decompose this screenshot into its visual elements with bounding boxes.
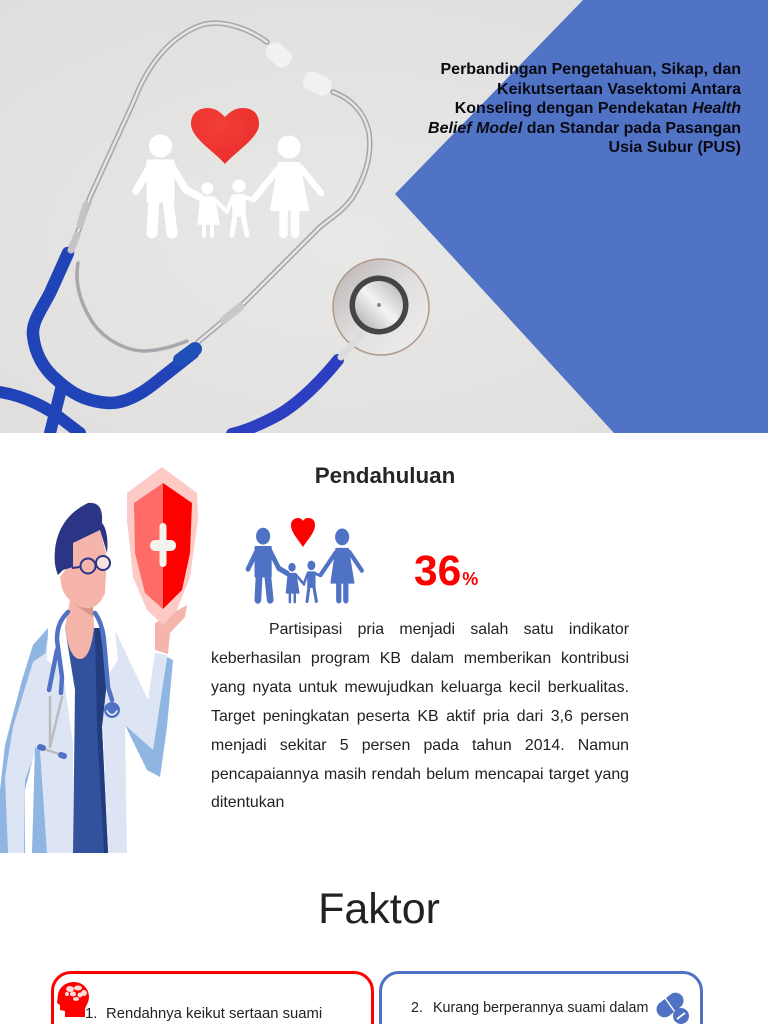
shield: [127, 467, 198, 625]
icon: white family: [136, 134, 321, 236]
title: Belief Model dan Standar pada Pasangan: [428, 120, 741, 136]
icon: red head with brain: [57, 982, 89, 1017]
icon: blue pills: [656, 992, 689, 1024]
illustration: doctor with shield: [0, 467, 198, 853]
intro paragraph: Partisipasi pria menjadi salah satu indikator: [269, 621, 629, 638]
blue diamond panel: [395, 0, 768, 433]
scrubs: [65, 628, 108, 853]
intro paragraph: yang nyata untuk mewujudkan keluarga kecil berkualitas.: [211, 679, 629, 696]
stat: 36 percent: 36%: [414, 548, 478, 595]
title: [428, 61, 742, 156]
hero banner: [0, 0, 768, 433]
stethoscope on doctor: [40, 612, 120, 756]
heading: Pendahuluan: Pendahuluan: [315, 463, 455, 488]
title: Keikutsertaan Vasektomi Antara: [497, 80, 741, 98]
icon: stethoscope ear tips: [262, 39, 334, 98]
icon: stethoscope: [0, 23, 370, 434]
coat right side: [100, 625, 173, 853]
icon: blue family with heart: [246, 518, 364, 604]
icon: heart: [191, 108, 259, 164]
heading: Faktor: Faktor: [318, 885, 440, 933]
hand: [155, 605, 187, 654]
head and neck: [55, 503, 110, 659]
intro paragraph: Target peningkatan peserta KB aktif pria dari 3,6 persen: [211, 708, 629, 725]
intro paragraph: keberhasilan program KB dalam memberikan kontribusi: [211, 650, 629, 667]
title: Perbandingan Pengetahuan, Sikap, dan: [440, 61, 741, 78]
panel: factor 1: [51, 971, 374, 1024]
title: Konseling dengan Pendekatan Health: [455, 100, 741, 117]
intro paragraph: menjadi sekitar 5 persen pada tahun 2014. Namun: [211, 737, 629, 754]
factor 2 text: 2.: [411, 1000, 423, 1016]
factor 1 text: 1.: [85, 1006, 97, 1022]
title: Usia Subur (PUS): [609, 139, 741, 156]
coat left sleeve: [0, 628, 73, 853]
intro paragraph: pencapaiannya masih rendah belum mencapai target yang: [211, 766, 629, 783]
collar: [47, 617, 118, 677]
intro paragraph: [211, 621, 629, 811]
factor 2 text: Kurang berperannya suami dalam: [433, 1000, 648, 1016]
icon: chest piece: [333, 259, 429, 357]
intro paragraph: ditentukan: [211, 794, 284, 811]
panel: factor 2: [379, 971, 703, 1024]
factor 1 text: Rendahnya keikut sertaan suami: [106, 1006, 322, 1022]
